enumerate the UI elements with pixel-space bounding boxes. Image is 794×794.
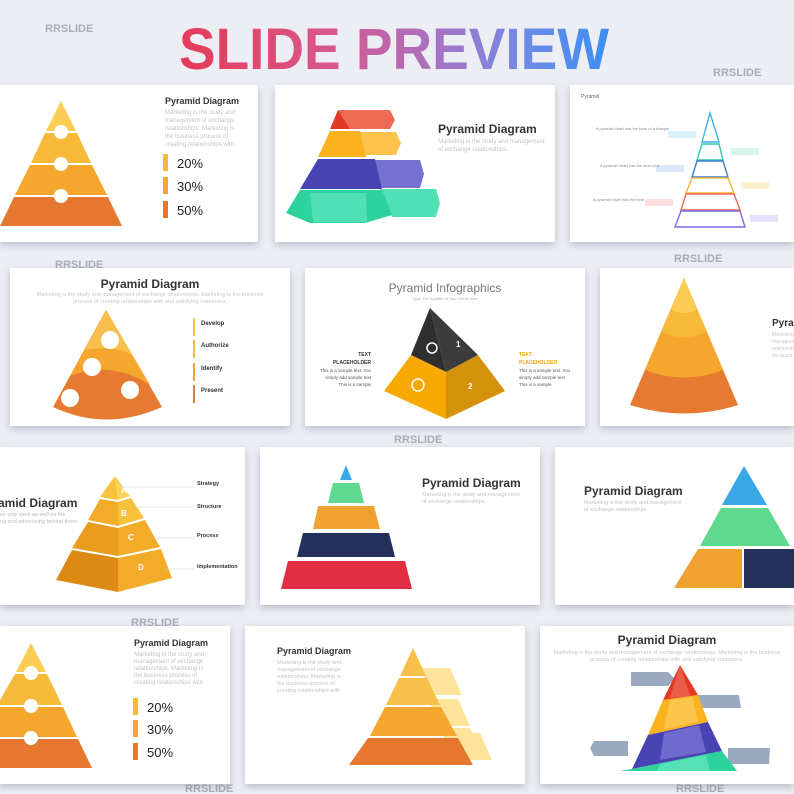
watermarks: RRSLIDE <box>674 253 722 265</box>
panel: row1 slide3: A pyramid chart has the form of a <box>600 163 660 168</box>
panel: row1 slide1: management of exchange <box>165 118 235 124</box>
panel: row1 slide1: 30% <box>177 179 203 194</box>
panel: row2 slide2: PLACEHOLDER <box>519 360 557 366</box>
panel: row3 slide1: Strategy <box>197 481 220 487</box>
panel: row1 slide1: 50% <box>177 203 203 218</box>
panel: row4 slide3: Marketing is the study and management of exchange relationships. Marketing is the business <box>554 650 781 656</box>
panel: row2 slide2: Pyramid Infographics <box>389 281 501 295</box>
watermarks: RRSLIDE <box>713 67 761 79</box>
panel: row2 slide2: This is a sample <box>338 382 371 387</box>
panel: row4 slide2: management of exchange <box>277 667 341 673</box>
panel: row4 slide2: the business process of <box>277 681 335 687</box>
panel: row4 slide1: the business process of <box>134 673 197 679</box>
panel: row2 slide1: Present <box>201 388 223 394</box>
panel: row4 slide2: creating relationships with <box>277 688 340 694</box>
panel: row1 slide1 <box>0 85 258 242</box>
panel: row1 slide1: 20% <box>177 156 203 171</box>
panel: row4 slide1: management of exchange <box>134 659 204 665</box>
panel: row1 slide1: Pyramid Diagram <box>165 96 239 106</box>
watermarks: RRSLIDE <box>131 617 179 629</box>
panel: row2 slide1: Marketing is the study and management of exchange relationships. Marketing is the business <box>37 292 264 298</box>
panel: row2 slide2: This is a sample text. You <box>519 368 571 373</box>
panel: row2 slide2: Type The Subtitle of Your Great Here <box>412 296 479 301</box>
panel: row2 slide2: TEXT <box>519 352 532 358</box>
panel: row4 slide1: relationships. Marketing is <box>134 666 203 672</box>
panel: row2 slide1: process of creating relationships with and satisfying customers. <box>73 299 227 305</box>
panel: row3 slide1: Implementation <box>197 564 238 570</box>
panel: row4 slide2: Marketing is the study and <box>277 660 341 666</box>
panel: row2 slide3: Marketing <box>772 332 794 338</box>
panel: row3 slide2: Marketing is the study and management <box>422 492 520 498</box>
panel: row1 slide2: Pyramid Diagram <box>438 122 537 136</box>
panel: row4 slide3: process of creating relationships with and satisfying customers. <box>590 657 744 663</box>
panel: row3 slide1: B <box>121 509 127 518</box>
panel: row4 slide2: Pyramid Diagram <box>277 646 351 656</box>
panel: row2 slide2: simply add sample text <box>325 375 372 380</box>
title: SLIDE PREVIEW <box>179 17 609 82</box>
panel: row4 slide1: creating relationships with <box>134 680 203 686</box>
panel: row3 slide2: Pyramid Diagram <box>422 476 521 490</box>
panel: row2 slide2: PLACEHOLDER <box>333 360 371 366</box>
panel: row1 slide1: the business process of <box>165 134 228 140</box>
panel: row4 slide3 <box>540 626 794 784</box>
panel: row4 slide1: 20% <box>147 700 173 715</box>
panel: row3 slide1: ng and advertising behind them. <box>0 519 79 525</box>
panel: row2 slide2: This is a sample text. You <box>320 368 371 373</box>
panel: row1 slide2 <box>275 85 555 242</box>
panel: row2 slide2: simply add sample text <box>519 375 566 380</box>
panel: row3 slide1: amid Diagram <box>0 496 77 510</box>
panel: row3 slide1: C <box>128 533 134 542</box>
panel: row4 slide1: Pyramid Diagram <box>134 638 208 648</box>
panel: row3 slide1: A <box>121 486 127 495</box>
panel: row1 slide2: Marketing is the study and management <box>438 139 545 145</box>
panel: row1 slide3 <box>570 85 794 242</box>
panel: row2 slide3: relationsh <box>772 346 794 352</box>
panel: row3 slide1: Process <box>197 533 218 539</box>
panel: row2 slide1: Develop <box>201 321 225 327</box>
panel: row3 slide3: Marketing is the study and management <box>584 500 682 506</box>
panel: row2 slide1: Pyramid Diagram <box>101 277 199 291</box>
panel: row2 slide2: This is a sample <box>519 382 552 387</box>
panel: row3 slide2: of exchange relationships. <box>422 499 486 505</box>
panel: row2 slide1: Identify <box>201 366 223 372</box>
panel: row1 slide1: relationships. Marketing is <box>165 126 234 132</box>
panel: row2 slide3: the busin <box>772 353 793 359</box>
watermarks: RRSLIDE <box>55 259 103 271</box>
panel: row3 slide3: of exchange relationships. <box>584 507 648 513</box>
panel: row2 slide2 <box>305 268 585 426</box>
panel: row4 slide2: relationships. Marketing is <box>277 674 341 680</box>
panel: row4 slide1: 50% <box>147 745 173 760</box>
panel: row3 slide1: es only work as well as the <box>0 512 65 518</box>
panel: row4 slide1 <box>0 626 230 784</box>
panel: row3 slide2 <box>260 447 540 605</box>
panel: row2 slide2: TEXT <box>358 352 371 358</box>
panel: row2 slide1 <box>10 268 290 426</box>
panel: row2 slide2: 1 <box>456 340 461 349</box>
panel: row3 slide3 <box>555 447 794 605</box>
panel: row1 slide1: Marketing is the study and <box>165 110 235 116</box>
panel: row1 slide1: creating relationships with <box>165 142 234 148</box>
panel: row4 slide1: 30% <box>147 722 173 737</box>
panel: row1 slide3: A pyramid chart has the form of a triangle <box>596 126 670 131</box>
panel: row3 slide3: Pyramid Diagram <box>584 484 683 498</box>
watermarks: RRSLIDE <box>45 23 93 35</box>
panel: row2 slide3 <box>600 268 794 426</box>
panel: row1 slide3: Pyramid <box>581 94 600 100</box>
panel: row3 slide1 <box>0 447 245 605</box>
panel: row2 slide1: Authorize <box>201 343 229 349</box>
panel: row1 slide3: A pyramid chart has the form <box>593 197 645 202</box>
panel: row4 slide1: Marketing is the study and <box>134 652 204 658</box>
panel: row4 slide3: Pyramid Diagram <box>618 633 716 647</box>
panel: row1 slide2: of exchange relationships. <box>438 147 508 153</box>
watermarks: RRSLIDE <box>394 434 442 446</box>
panel: row2 slide2: 2 <box>468 382 473 391</box>
panel: row4 slide2 <box>245 626 525 784</box>
panel: row3 slide1: Structure <box>197 504 221 510</box>
panel: row3 slide1: D <box>138 563 144 572</box>
panel: row2 slide3: managem <box>772 339 794 345</box>
